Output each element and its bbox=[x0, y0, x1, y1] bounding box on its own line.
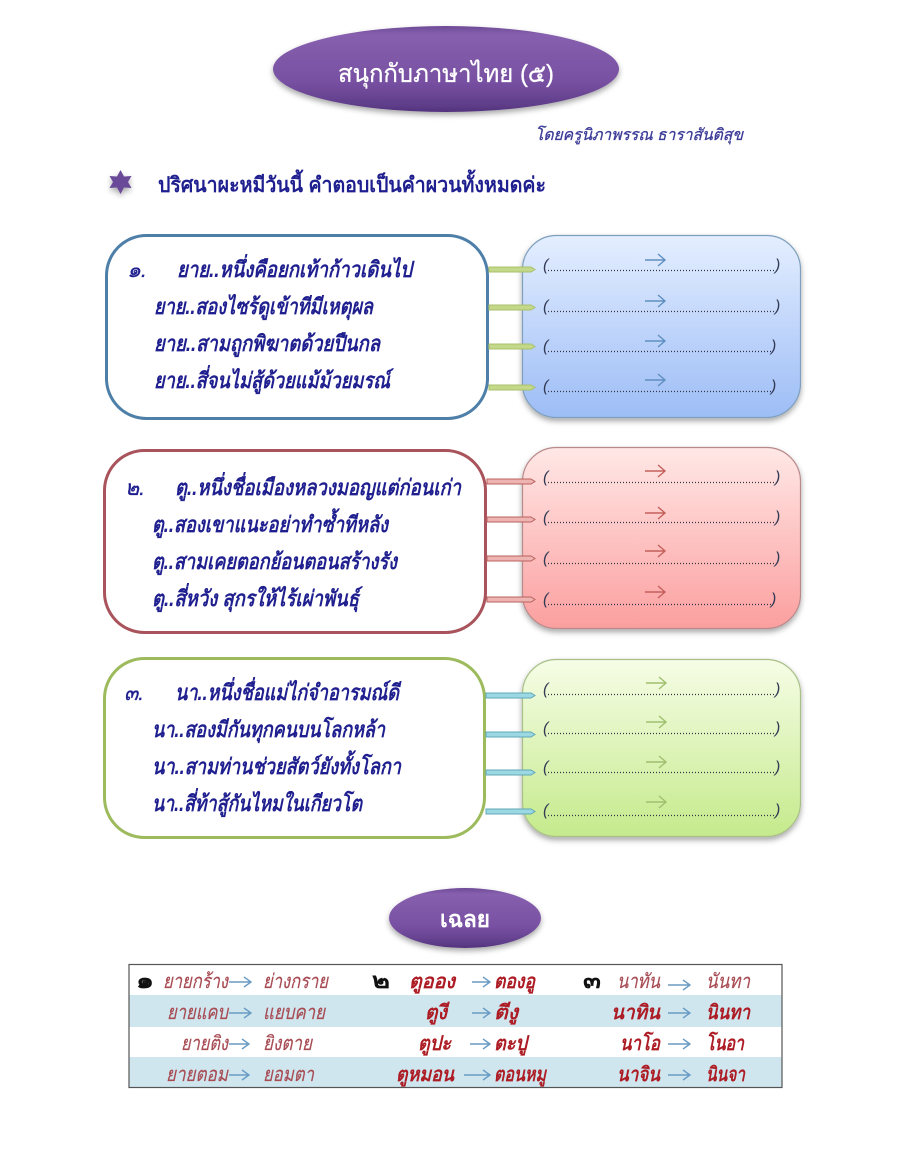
column 1: ย่างกราย bbox=[263, 971, 329, 993]
panel: riddle 1 bbox=[106, 236, 488, 418]
panel: answer box 1 bbox=[489, 236, 800, 418]
connectors bbox=[489, 267, 535, 390]
panel: riddle 1: ยาย..สามถูกพิฆาตด้วยปืนกล bbox=[154, 331, 381, 358]
answer lines: ) bbox=[773, 720, 780, 737]
column 3 bbox=[583, 968, 751, 1086]
panel: riddle 2: ตู..สองเขาแนะอย่าทำซ้ำทีหลัง bbox=[152, 508, 390, 539]
answer lines bbox=[543, 469, 780, 608]
column 2: ตูออง bbox=[409, 971, 457, 994]
panel: riddle 1: ยาย..หนึ่งคือยกเท้าก้าวเดินไป bbox=[177, 253, 415, 282]
panel: riddle 2: ตู..สี่หวัง สุกรให้ไร้เผ่าพันธุ์ bbox=[152, 582, 363, 613]
answer lines bbox=[543, 681, 780, 819]
column 3: นันทา bbox=[706, 971, 751, 993]
column 2: ตูงี bbox=[425, 1001, 450, 1025]
column 3: นาจิน bbox=[617, 1064, 661, 1086]
answer heading: เฉลย bbox=[440, 906, 490, 932]
title banner: สนุกกับภาษาไทย (๕) bbox=[338, 59, 554, 89]
column 1: ยายแคบ bbox=[167, 1002, 230, 1024]
answer table bbox=[129, 964, 782, 1088]
answer lines: ( bbox=[543, 338, 550, 355]
answer lines: ) bbox=[769, 591, 776, 608]
panel: answer box 2 bbox=[487, 448, 800, 628]
column 1: ๑ bbox=[136, 968, 154, 993]
icon: purple star bbox=[110, 170, 132, 194]
column 1: ยายกร้าง bbox=[163, 971, 229, 993]
panel: riddle 3: นา..หนึ่งชื่อแม่ไก่จำอารมณ์ดี bbox=[175, 676, 402, 705]
answer lines: ( bbox=[543, 378, 550, 395]
answer lines bbox=[543, 257, 780, 395]
answer lines: ( bbox=[543, 720, 550, 737]
panel: riddle 3: ๓. bbox=[124, 682, 144, 705]
answer lines: ) bbox=[769, 378, 776, 395]
column 2: ตีงู bbox=[494, 1001, 520, 1025]
answer lines: ( bbox=[543, 257, 550, 274]
answer lines: ) bbox=[773, 509, 780, 526]
answer lines: ) bbox=[773, 759, 780, 776]
answer lines: ) bbox=[773, 469, 780, 486]
title banner bbox=[273, 26, 619, 112]
answer lines: ( bbox=[543, 591, 550, 608]
panel: riddle 2 bbox=[104, 450, 486, 632]
column 1 bbox=[136, 968, 329, 1086]
answer lines: ) bbox=[773, 681, 780, 698]
answer lines: ( bbox=[543, 759, 550, 776]
answer lines: ( bbox=[543, 298, 550, 315]
column 1: ยอมตา bbox=[263, 1064, 315, 1086]
answer lines: ( bbox=[543, 509, 550, 526]
column 2: ตอนหมู bbox=[494, 1064, 547, 1087]
column 1: ยิงตาย bbox=[263, 1033, 313, 1055]
panel: riddle 2: ๒. bbox=[125, 477, 145, 500]
panel: answer box 3 bbox=[486, 660, 800, 836]
panel: riddle 3: นา..สี่ท้าสู้กันไหมในเกียวโต bbox=[152, 787, 363, 818]
answer lines: ( bbox=[543, 469, 550, 486]
answer lines: ) bbox=[773, 550, 780, 567]
panel: riddle 1: ๑. bbox=[127, 259, 147, 282]
column 3: นินทา bbox=[706, 1002, 751, 1024]
column 3: โนอา bbox=[706, 1031, 745, 1055]
panel: riddle 1: ยาย..สองไซร้ดูเข้าทีมีเหตุผล bbox=[154, 293, 374, 321]
arrows bbox=[645, 465, 665, 598]
column 2: ตะปู bbox=[494, 1033, 530, 1056]
column 2: ๒ bbox=[372, 968, 390, 993]
answer heading bbox=[389, 888, 541, 948]
connectors bbox=[486, 693, 535, 814]
answer lines: ( bbox=[543, 681, 550, 698]
column 2: ตูหมอน bbox=[396, 1064, 455, 1087]
panel: riddle 2: ตู..หนึ่งชื่อเมืองหลวงมอญแต่ก่อนเก่า bbox=[175, 471, 462, 502]
arrows bbox=[645, 254, 665, 386]
column 3: นาโอ bbox=[620, 1031, 661, 1055]
column 2: ตูปะ bbox=[418, 1033, 452, 1056]
answer lines: ( bbox=[543, 550, 550, 567]
column 3: นาทัน bbox=[617, 971, 661, 993]
column 1: ยายตอม bbox=[166, 1064, 230, 1086]
panel: riddle 2: ตู..สามเคยตอกย้อนตอนสร้างรัง bbox=[152, 549, 399, 576]
table arrows bbox=[229, 977, 690, 1080]
author credit: โดยครูนิภาพรรณ ธาราสันติสุข bbox=[535, 125, 744, 145]
connectors bbox=[487, 479, 535, 602]
answer lines: ( bbox=[543, 802, 550, 819]
answer lines: ) bbox=[773, 802, 780, 819]
arrows bbox=[646, 677, 666, 808]
column 1: ยายติง bbox=[181, 1033, 229, 1055]
column 2: ตองอู bbox=[494, 971, 536, 994]
instruction text: ปริศนาผะหมีวันนี้ คำตอบเป็นคำผวนทั้งหมดค่ะ bbox=[158, 169, 546, 197]
panel: riddle 3 bbox=[104, 658, 484, 838]
column 2 bbox=[372, 968, 547, 1087]
column 1: แยบคาย bbox=[263, 1002, 326, 1024]
answer lines: ) bbox=[773, 298, 780, 315]
column 3: นินจา bbox=[706, 1064, 746, 1086]
panel: riddle 3: นา..สองมีกันทุกคนบนโลกหล้า bbox=[152, 716, 386, 744]
panel: riddle 3: นา..สามท่านช่วยสัตว์ยังทั้งโลกา bbox=[152, 750, 402, 779]
answer lines: ) bbox=[769, 338, 776, 355]
answer lines: ) bbox=[773, 257, 780, 274]
column 3: ๓ bbox=[583, 968, 601, 993]
column 3: นาทิน bbox=[611, 1002, 661, 1024]
panel: riddle 1: ยาย..สี่จนไม่สู้ด้วยแม้ม้วยมรณ์ bbox=[154, 364, 394, 395]
